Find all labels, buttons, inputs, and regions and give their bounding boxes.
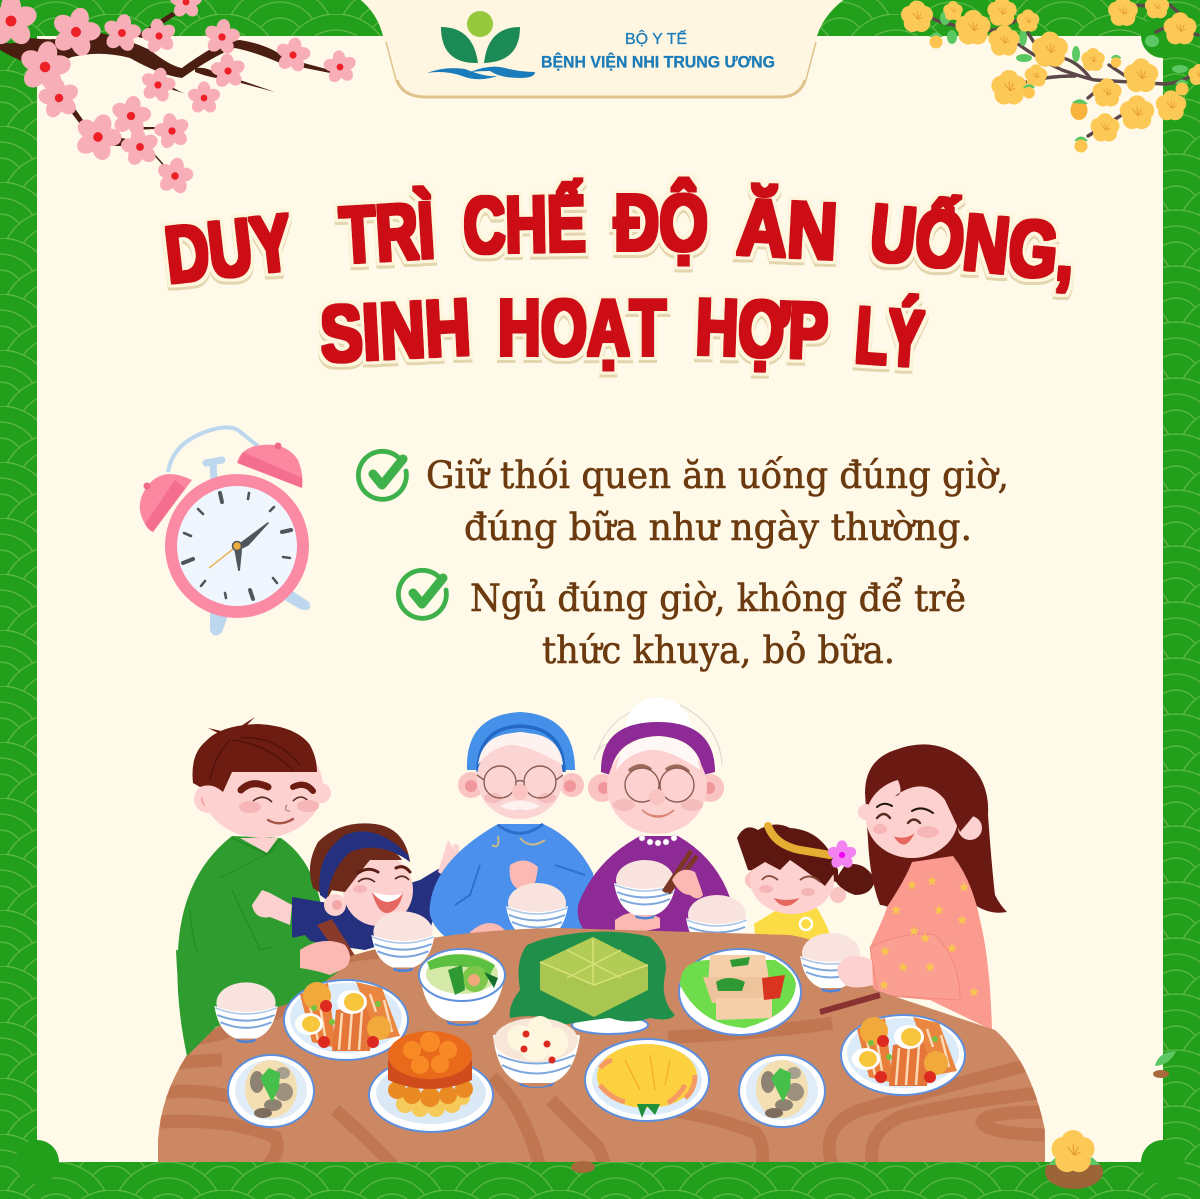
title: HỢP [694, 282, 829, 376]
title [161, 178, 1079, 384]
bullet 2: check icon and text [398, 570, 966, 672]
chopsticks on table [820, 995, 880, 1012]
text: eating habits: đúng bữa như ngày thường. [464, 506, 972, 549]
icon: check [358, 451, 406, 499]
icon: hospital logo [427, 11, 535, 79]
logo text [541, 31, 775, 72]
father's sleeve and hand over table [176, 935, 350, 1056]
logo text: BỘ Y TẾ [625, 31, 687, 48]
decoration: bottom seed [571, 1161, 595, 1173]
food: banh chung [510, 932, 675, 1034]
title: TRÌ [338, 185, 437, 280]
logo text: BỆNH VIỆN NHI TRUNG ƯƠNG [541, 52, 775, 72]
food: rice bowl with mother's hands [800, 933, 873, 992]
text: eating habits [426, 454, 1009, 549]
food: mushroom plate left [228, 1055, 314, 1127]
title: CHẾ [463, 179, 586, 270]
father [177, 717, 335, 1056]
text: sleep habits [470, 577, 966, 672]
icon: alarm clock [140, 427, 310, 636]
bullet 1: check icon and text [358, 451, 1009, 549]
food: five-colour sticky rice [369, 1031, 493, 1132]
food: rice bowl left [214, 982, 278, 1043]
title: LÝ [853, 290, 926, 384]
title: ĐỘ [614, 178, 708, 267]
header tab with hospital logo [358, 0, 846, 98]
food: rice bowl centre-left [371, 911, 435, 972]
decoration: yellow apricot branch [899, 0, 1200, 152]
grandfather [430, 712, 595, 955]
title: SINH [318, 282, 473, 379]
food: pickled onion bowl [493, 1016, 580, 1088]
decoration: corner leaf and bud right [1153, 1051, 1176, 1078]
illustration: family meal [158, 697, 1045, 1168]
title: UỐNG, [866, 187, 1079, 297]
title: ĂN [735, 182, 840, 276]
table [158, 928, 1045, 1168]
title: HOẠT [498, 283, 666, 372]
food: braised meat plate right [841, 1015, 965, 1095]
text: sleep habits: thức khuya, bỏ bữa. [542, 629, 895, 672]
icon: check [398, 570, 446, 618]
food: mushroom plate right [739, 1055, 825, 1127]
title: DUY [161, 197, 296, 300]
grandmother [578, 697, 748, 954]
text: eating habits: Giữ thói quen ăn uống đúng giờ, [426, 454, 1009, 497]
text: sleep habits: Ngủ đúng giờ, không để trẻ [470, 577, 966, 620]
food: salad bowl [419, 949, 505, 1026]
mother [858, 744, 1007, 1030]
food: yellow dish plate [585, 1039, 709, 1121]
food: braised meat plate left [284, 980, 408, 1060]
decoration: cherry blossom branch [0, 0, 359, 198]
decoration: bottom flower [1045, 1130, 1103, 1189]
boy [252, 823, 459, 977]
food: spring rolls plate [679, 949, 801, 1035]
daughter [737, 824, 875, 968]
